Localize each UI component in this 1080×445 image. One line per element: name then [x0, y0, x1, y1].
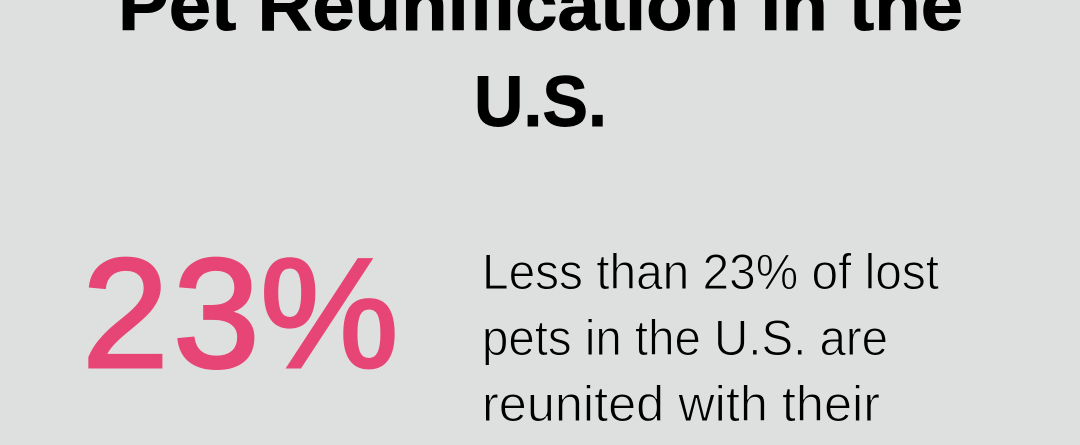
description text: Less than 23% of lost: [482, 244, 939, 300]
description text: [482, 244, 939, 432]
title: U.S.: [474, 63, 607, 142]
title: [118, 0, 963, 142]
description text: reunited with their: [482, 376, 880, 432]
big statistic: 23%: 23%: [82, 227, 399, 401]
description text: pets in the U.S. are: [482, 310, 888, 366]
